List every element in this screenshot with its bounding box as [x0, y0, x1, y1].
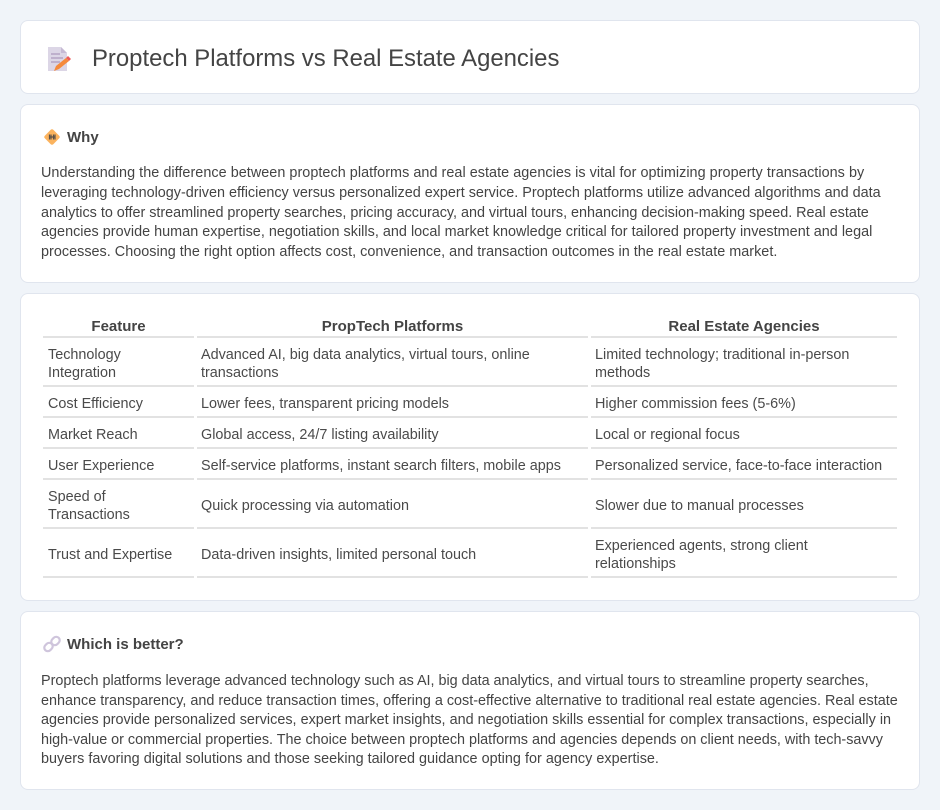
comparison table: Advanced AI, big data analytics, virtual tours, online — [201, 347, 530, 363]
text block: why: Understanding the difference between proptech platforms and real estate agencies is vital for optimizing property transactions by — [41, 165, 864, 181]
comparison table: Transactions — [48, 507, 130, 523]
comparison table: Global access, 24/7 listing availability — [201, 427, 439, 443]
text block: which is better: Proptech platforms leverage advanced technology such as AI, big data analytics, and virtual tours to streamline property searches, — [41, 673, 869, 689]
comparison table: transactions — [201, 365, 279, 381]
text block: which is better: agencies provide personalized services, expert market insights, and negotiation skills essential for complex transactions, especially in — [41, 712, 891, 728]
panel: which is better card — [20, 611, 920, 790]
heading: which is better: Which is better? — [67, 636, 184, 653]
comparison table: Data-driven insights, limited personal touch — [201, 547, 476, 563]
comparison table: Experienced agents, strong client — [595, 538, 808, 554]
icon: link — [43, 636, 61, 652]
comparison table: User Experience — [48, 458, 154, 474]
text block: which is better: high-value or commercial properties. The choice between proptech platforms and agencies depends on client needs, with tech-savvy — [41, 732, 883, 748]
icon: warning diamond — [44, 129, 60, 145]
title: Proptech Platforms vs Real Estate Agencies — [92, 45, 559, 72]
comparison table: Self-service platforms, instant search filters, mobile apps — [201, 458, 561, 474]
comparison table: Real Estate Agencies — [668, 318, 820, 335]
text block: which is better — [41, 673, 898, 767]
text block: why: leveraging technology-driven efficiency versus personalized expert service. Proptech platforms utilize advanced algorithms and data — [41, 185, 881, 201]
panel: title card — [20, 20, 920, 94]
comparison table: Slower due to manual processes — [595, 498, 804, 514]
comparison table: Limited technology; traditional in-person — [595, 347, 849, 363]
icon: memo with pencil — [48, 47, 71, 71]
text block: which is better: enhance transparency, and reduce transaction times, offering a cost-effective alternative to traditional real estate agencies. Real estate — [41, 693, 898, 709]
comparison table: Personalized service, face-to-face interaction — [595, 458, 882, 474]
comparison table: Trust and Expertise — [48, 547, 172, 563]
text block: why: agencies provide human expertise, negotiation skills, and local market knowledge critical for tailored property investment and legal — [41, 224, 872, 240]
text block: why: processes. Choosing the right option affects cost, convenience, and transaction outcomes in the real estate market. — [41, 244, 777, 260]
text block: why — [41, 165, 881, 260]
text block: which is better: buyers favoring digital solutions and those seeking tailored guidance opting for agency expertise. — [41, 751, 659, 767]
comparison table: Market Reach — [48, 427, 138, 443]
text block: why: analytics to offer streamlined property searches, pricing accuracy, and virtual tours, enhancing decision-making speed. Real estate — [41, 205, 869, 221]
panel: comparison table card — [20, 293, 920, 601]
comparison table: Higher commission fees (5-6%) — [595, 396, 796, 412]
comparison table: Technology — [48, 347, 121, 363]
panel: why card — [20, 104, 920, 283]
comparison table: Cost Efficiency — [48, 396, 143, 412]
comparison table: methods — [595, 365, 650, 381]
comparison table: Integration — [48, 365, 116, 381]
heading: why: Why — [67, 129, 99, 146]
comparison table: Feature — [91, 318, 146, 335]
comparison table: relationships — [595, 556, 676, 572]
comparison table: PropTech Platforms — [322, 318, 463, 335]
comparison table — [43, 318, 897, 578]
comparison table: Lower fees, transparent pricing models — [201, 396, 449, 412]
comparison table: Local or regional focus — [595, 427, 740, 443]
comparison table: Speed of — [48, 489, 106, 505]
comparison table: Quick processing via automation — [201, 498, 409, 514]
